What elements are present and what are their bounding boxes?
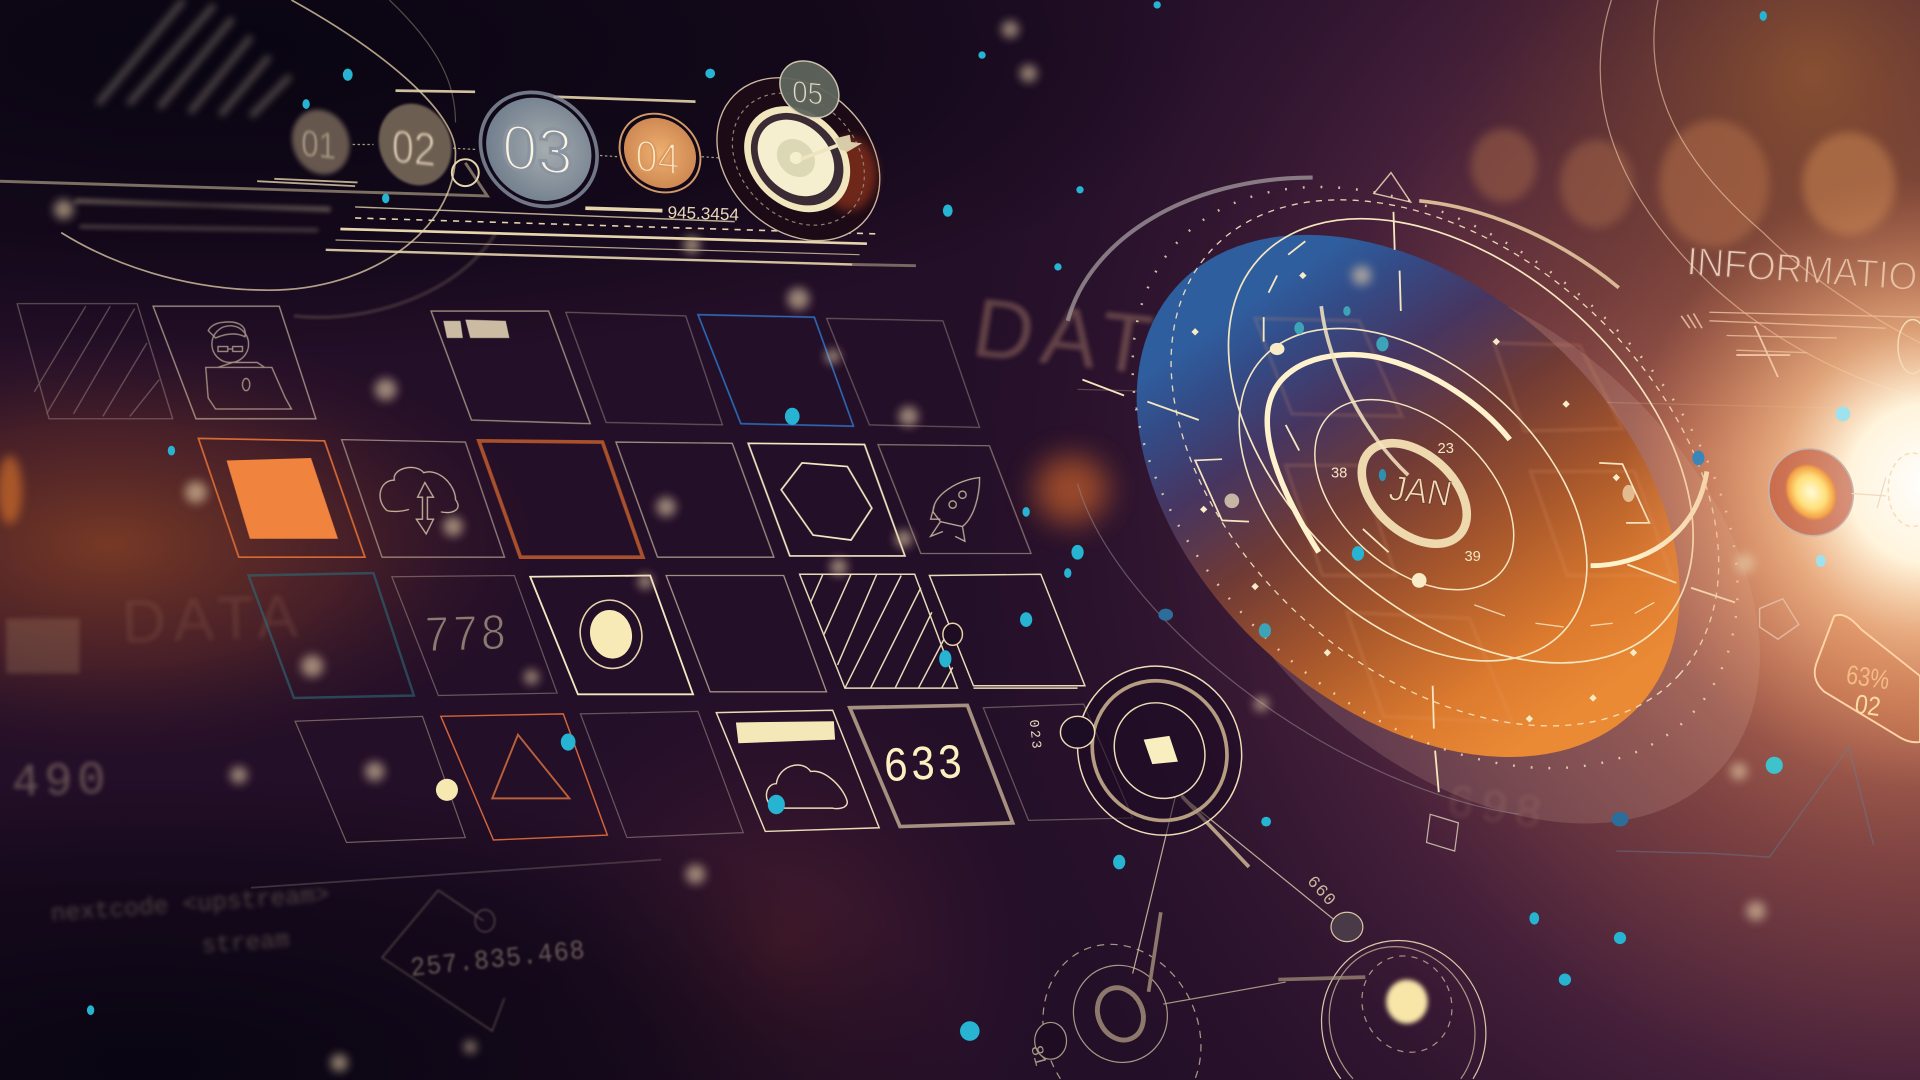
cell: bar and cloud xyxy=(716,710,879,831)
junction node xyxy=(436,779,458,801)
node: glowing lower right xyxy=(1278,873,1486,1079)
hot node xyxy=(1753,320,1920,551)
grid row 3 xyxy=(249,573,1085,698)
top-left large circle arcs xyxy=(61,0,496,317)
step 05: 05 xyxy=(792,75,823,112)
top-right faded discs xyxy=(1471,120,1896,247)
cell: glowing dot xyxy=(530,576,693,694)
blurred background text: DATA xyxy=(6,281,1551,842)
blurred background text: DATA: 698 xyxy=(1443,776,1551,842)
dial labels: 23 xyxy=(1438,441,1454,457)
lens flare xyxy=(1469,122,1920,906)
cell: cloud upload icon xyxy=(342,440,504,557)
step 03 xyxy=(457,69,620,230)
grey arc xyxy=(1068,178,1313,321)
cell: hexagon xyxy=(748,443,905,556)
cell: 633: 633 xyxy=(882,736,966,796)
faint horizontal rule xyxy=(1078,389,1920,410)
cell: orange block xyxy=(198,438,365,557)
dial labels: JAN xyxy=(1386,469,1455,514)
bottom square xyxy=(1427,814,1458,851)
step 03: 03 xyxy=(502,110,573,189)
data card 63% 02: 02 xyxy=(1853,689,1882,723)
inner ring xyxy=(1279,362,1550,627)
dotted outer ring xyxy=(1020,71,1850,884)
data card 63% 02 xyxy=(1815,615,1920,742)
grid row 2 xyxy=(198,438,1031,557)
cell: 778 xyxy=(392,576,557,696)
cell: empty xyxy=(827,318,980,427)
cell: hatched xyxy=(17,304,173,419)
dial labels: 39 xyxy=(1464,549,1481,565)
cell: 023 xyxy=(983,704,1133,820)
cell: frame with node xyxy=(929,574,1085,686)
cell: empty xyxy=(666,576,827,692)
bright right arc xyxy=(1591,471,1707,566)
value label: 945.3454 xyxy=(667,202,740,224)
step 04: 04 xyxy=(636,130,680,184)
cell: teal xyxy=(249,573,414,698)
cell: person with laptop icon xyxy=(153,306,316,419)
dial labels: 38 xyxy=(1331,466,1347,482)
faint grid seen through disc xyxy=(1255,318,1671,722)
cell: two bars xyxy=(431,311,590,424)
bottom faint orbit xyxy=(1078,484,1518,814)
grid row 4 xyxy=(295,704,1133,842)
data card 63% 02: 63% xyxy=(1844,660,1891,696)
node: glowing lower right: 660 xyxy=(1302,873,1339,911)
blurred background text: DATA: DATA xyxy=(967,281,1224,398)
cell: 633 xyxy=(850,705,1013,827)
icon: target with arrow xyxy=(684,45,913,273)
node: dashed lower left: 81 xyxy=(1025,1044,1049,1068)
cell: empty xyxy=(295,716,465,842)
step 04 xyxy=(604,97,716,209)
bracket marks xyxy=(1195,459,1249,522)
secondary translucent disc xyxy=(1072,156,1867,934)
step 01: 01 xyxy=(301,123,336,168)
top-left hatch pattern xyxy=(98,0,290,116)
JAN ring xyxy=(1343,423,1486,564)
right side ruled lines xyxy=(1681,312,1920,377)
bright inner arc xyxy=(1267,355,1510,552)
step 02 xyxy=(367,93,464,196)
dial markers xyxy=(1191,272,1637,722)
top-right arcs xyxy=(1600,0,1920,398)
data diamond: 257.835.468 xyxy=(382,890,587,1031)
grid row 1 xyxy=(17,304,980,427)
blurred code text xyxy=(50,882,330,961)
dial labels xyxy=(1331,441,1481,565)
cell: empty xyxy=(616,442,774,557)
hexagon outline xyxy=(1760,599,1799,639)
faint baseline xyxy=(251,860,661,888)
step 01 xyxy=(282,101,359,183)
step 05 xyxy=(768,49,850,130)
outer ring xyxy=(1144,132,1778,750)
curved pointer xyxy=(1321,306,1408,475)
data diamond: 257.835.468: 257.835.468 xyxy=(409,935,587,984)
blurred background text: DATA: DATA xyxy=(121,581,306,656)
blurred code text: stream xyxy=(201,928,290,961)
node: dashed lower left xyxy=(1025,912,1286,1079)
cell: rocket icon xyxy=(878,444,1031,553)
cell: triangle xyxy=(441,714,607,840)
faint right chart line xyxy=(1616,747,1873,857)
tick marks xyxy=(1082,212,1735,792)
main dial rings xyxy=(1020,71,1850,884)
cell: blue xyxy=(698,315,853,426)
timeline lines xyxy=(0,91,916,266)
top arc xyxy=(1419,201,1619,288)
main dial disc xyxy=(1035,130,1781,861)
step 02: 02 xyxy=(392,121,436,177)
blurred code text: nextcode <upstream> xyxy=(50,882,330,929)
cell: empty xyxy=(566,312,722,425)
cell: thick orange frame xyxy=(479,441,643,557)
cell: empty xyxy=(580,711,743,838)
middle ring xyxy=(1176,263,1650,726)
blurred background text: DATA: 490 xyxy=(11,754,111,810)
cell: 778: 778 xyxy=(424,606,509,668)
cell: 023: 023 xyxy=(1025,719,1043,752)
node: square target xyxy=(973,636,1344,973)
dashed ring xyxy=(1069,95,1821,831)
cell: diagonal hatch xyxy=(800,574,958,688)
